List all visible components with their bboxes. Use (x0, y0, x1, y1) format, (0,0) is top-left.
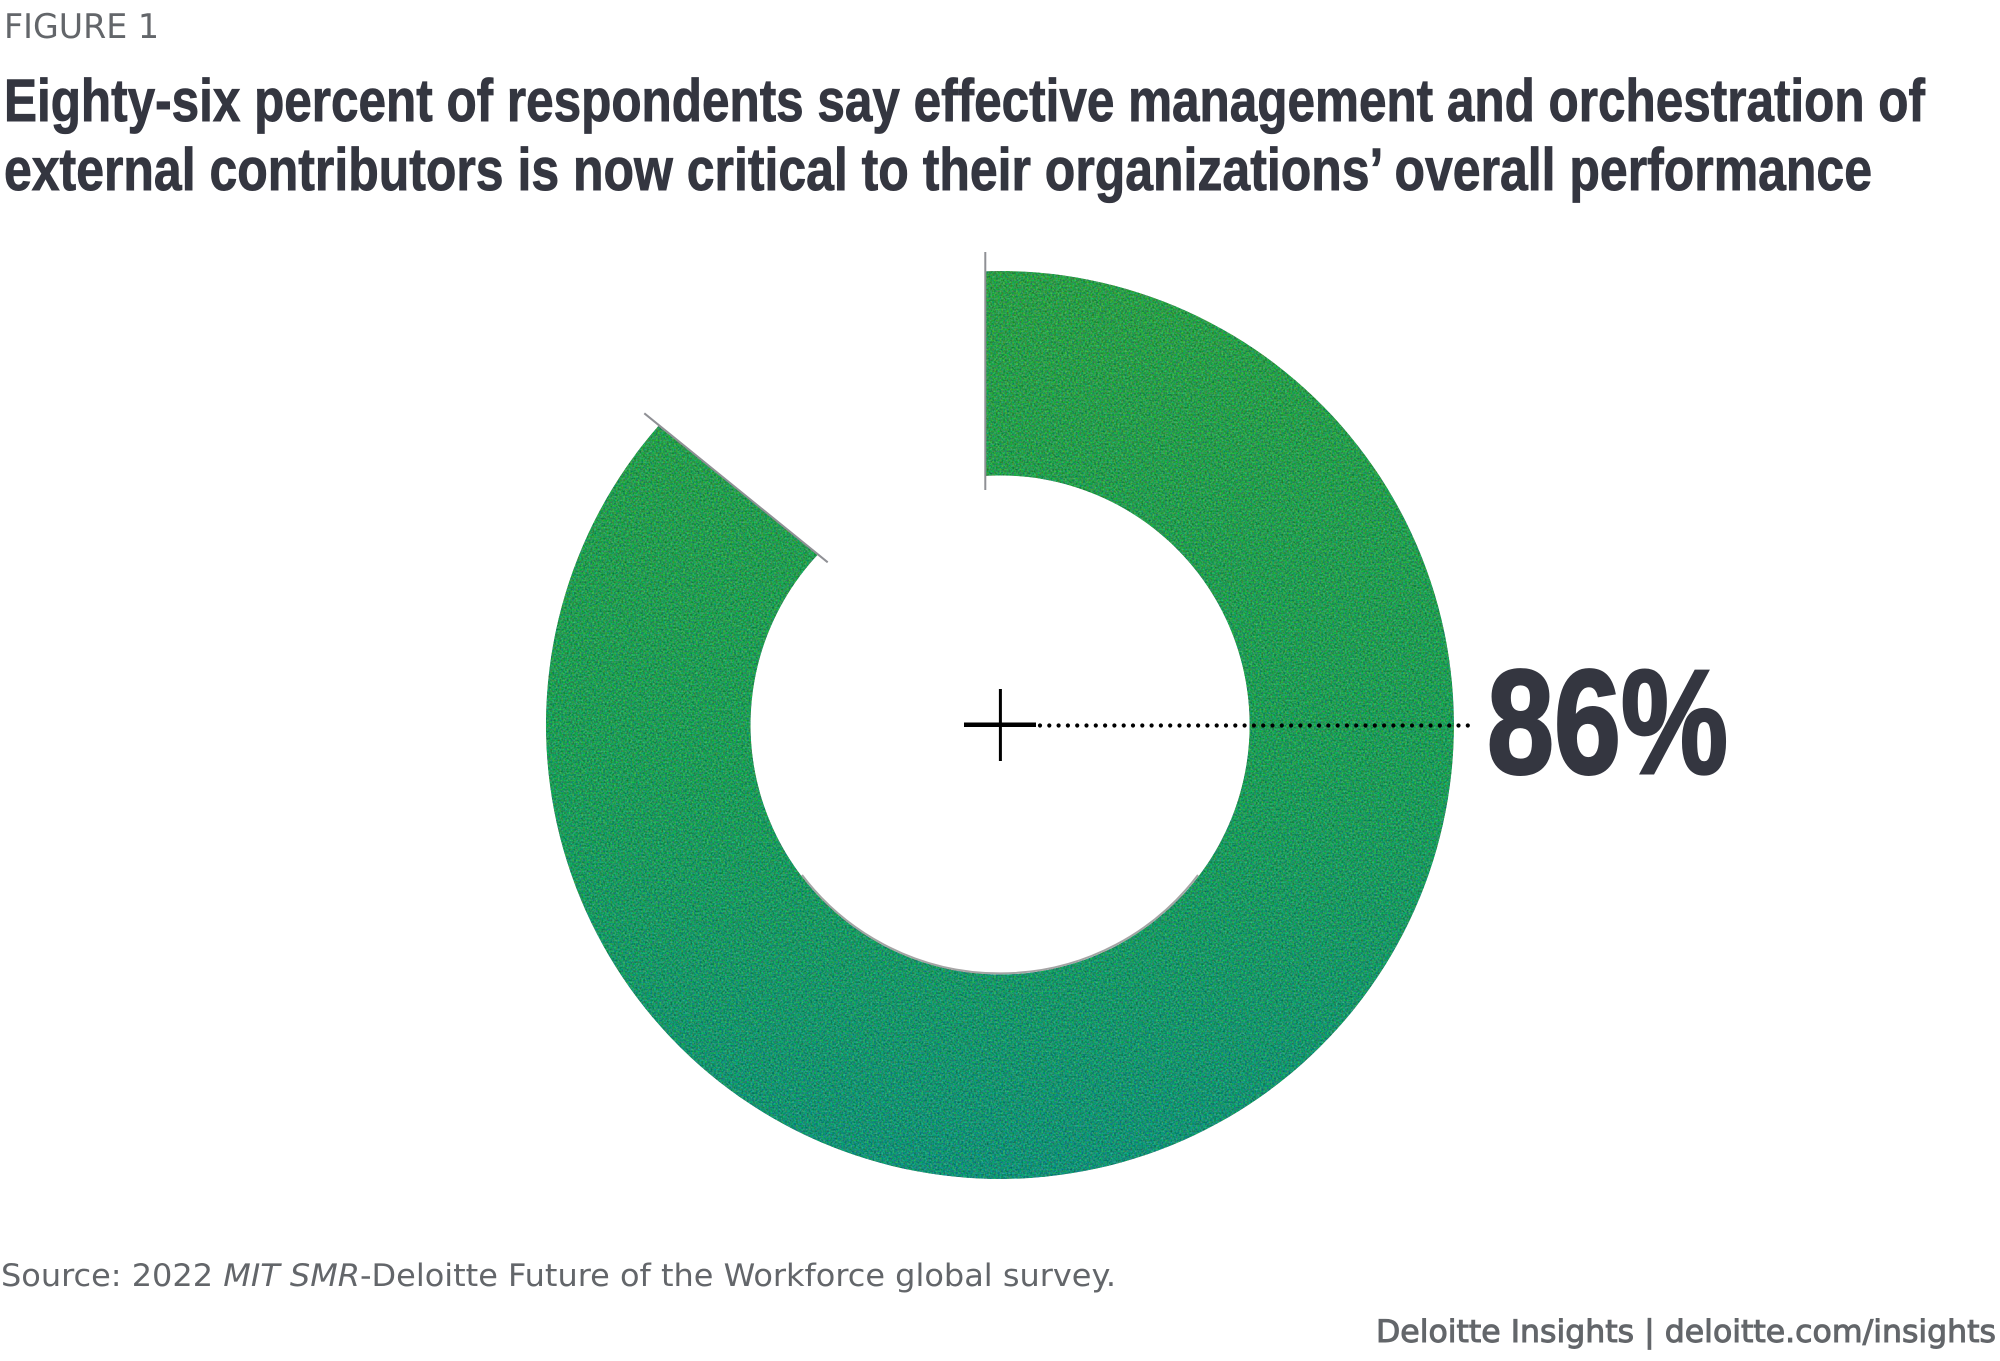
gap edge line: start (984, 252, 986, 490)
source note: Source: 2022 MIT SMR-Deloitte Future of the Workforce global survey. (1, 1258, 1116, 1294)
credit line: Deloitte Insights | deloitte.com/insights (1376, 1314, 1996, 1350)
figure label: FIGURE 1 (4, 7, 159, 47)
dotted leader line (1040, 723, 1470, 728)
inner shadow arc (802, 875, 1198, 973)
value label: 86%: 86% (1487, 640, 1728, 805)
donut chart: 86% (546, 252, 1454, 1179)
title (4, 67, 1926, 203)
donut segment (546, 271, 1454, 1179)
gap edge line: end (644, 413, 828, 562)
center crosshair (964, 689, 1036, 761)
